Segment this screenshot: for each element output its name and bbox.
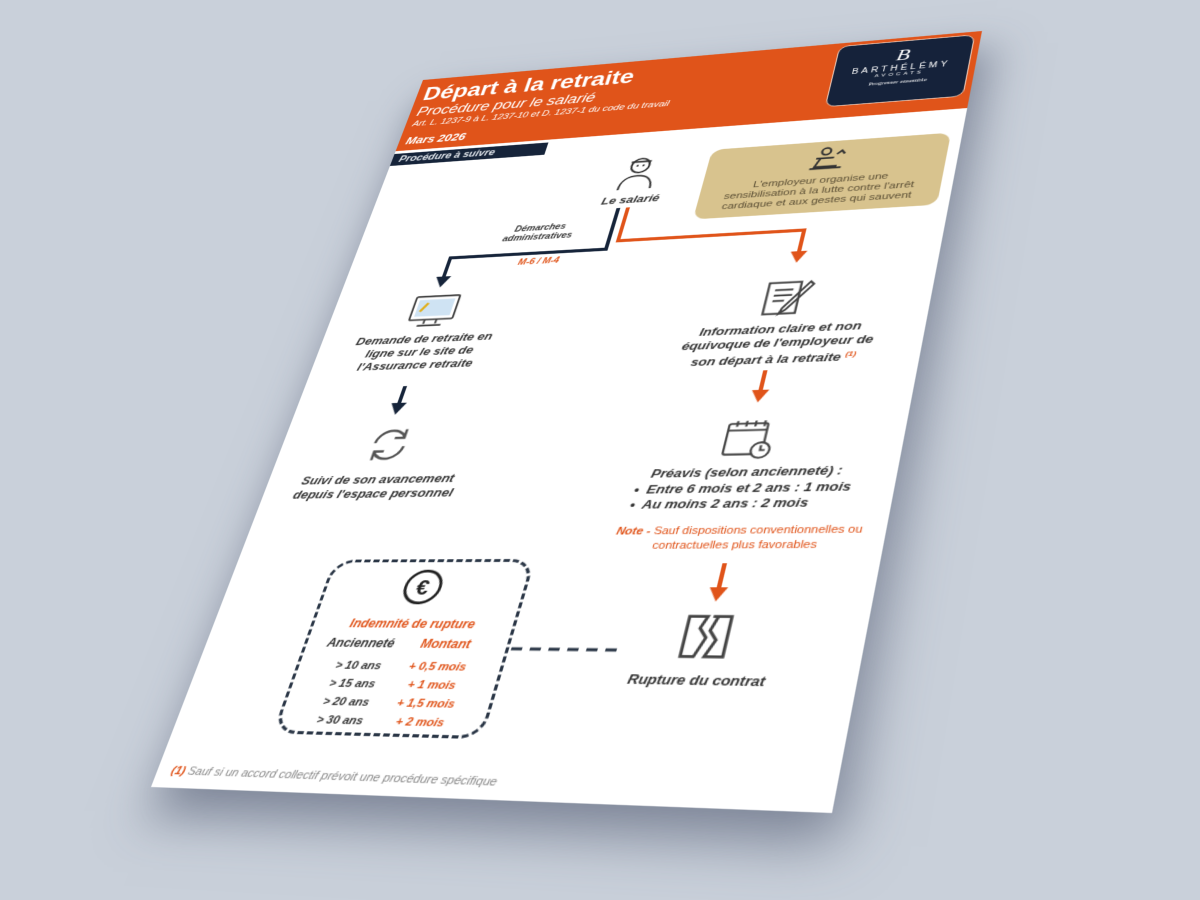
icon: refresh xyxy=(359,425,419,464)
dark branch xyxy=(443,208,618,278)
dashed connector xyxy=(511,649,625,650)
indemnite box: Indemnité de rupture xyxy=(348,617,477,631)
indemnite box: + 2 mois xyxy=(394,716,446,730)
arrows xyxy=(399,386,405,405)
header xyxy=(396,31,982,151)
step: rupture xyxy=(611,611,794,695)
icon: computer xyxy=(403,293,464,329)
logo: AVOCATS xyxy=(874,70,924,79)
step: preavis: Préavis (selon ancienneté) : xyxy=(650,463,844,480)
logo: Progresser ensemble xyxy=(868,76,928,87)
icon: euro xyxy=(396,568,450,606)
logo: BARTHÉLÉMY xyxy=(851,60,951,76)
step: information employeur: Information claire et non équivoque de l'employeur de son départ à la retraite (1) xyxy=(680,319,875,369)
step: demande en ligne: Demande de retraite en ligne sur le site de l'Assurance retraite xyxy=(354,330,494,373)
date: Mars 2026 xyxy=(404,131,468,146)
label: M-6/M-4: M-6 / M-4 xyxy=(517,256,560,267)
step: suivi: Suivi de son avancement depuis l'espace personnel xyxy=(291,471,456,501)
indemnite box: + 1 mois xyxy=(406,679,457,692)
section bar xyxy=(390,142,548,166)
indemnite box: + 1,5 mois xyxy=(395,697,457,711)
articles: Art. L. 1237-9 à L. 1237-10 et D. 1237-1 du code du travail xyxy=(411,99,670,128)
gold callout xyxy=(693,133,951,219)
icon: document pen xyxy=(757,275,819,318)
indemnite box xyxy=(272,559,536,739)
section bar: Procédure à suivre xyxy=(397,147,497,164)
step: information employeur xyxy=(675,272,888,370)
title: Départ à la retraite xyxy=(420,66,637,104)
flow lines xyxy=(151,31,982,813)
logo: B xyxy=(895,45,912,64)
salarie xyxy=(588,152,684,210)
step: suivi xyxy=(273,423,494,502)
indemnite box: > 20 ans xyxy=(321,696,371,709)
step: preavis: • Au moins 2 ans : 2 mois xyxy=(628,495,810,512)
step: rupture: Rupture du contrat xyxy=(626,671,767,689)
footnote: (1) Sauf si un accord collectif prévoit une procédure spécifique xyxy=(169,765,499,789)
orange branch xyxy=(611,196,812,263)
indemnite box: + 0,5 mois xyxy=(407,661,468,674)
icon: person xyxy=(612,153,665,191)
indemnite box: Montant xyxy=(419,637,473,651)
indemnite box: > 10 ans xyxy=(333,660,383,672)
salarie: Le salarié xyxy=(600,192,661,207)
paper xyxy=(151,31,982,813)
icon: euro: € xyxy=(413,577,432,599)
indemnite box: > 15 ans xyxy=(327,678,377,690)
label: demarches: Démarches administratives xyxy=(501,223,573,244)
icon: calendar xyxy=(717,418,780,462)
subtitle: Procédure pour le salarié xyxy=(415,90,598,119)
icon: torn paper xyxy=(672,612,740,662)
step: preavis xyxy=(591,415,892,562)
step: preavis: Note - Sauf dispositions conventionnelles ou contractuelles plus favorables xyxy=(615,524,864,552)
indemnite box: Ancienneté xyxy=(325,636,397,650)
indemnite box: > 30 ans xyxy=(315,714,365,727)
step: demande en ligne xyxy=(336,291,515,378)
gold callout: L'employeur organise une sensibilisation à la lutte contre l'arrêt cardiaque et aux gestes qui sauvent xyxy=(720,171,915,212)
logo xyxy=(825,34,975,107)
icon: cpr xyxy=(802,144,853,173)
step: preavis: • Entre 6 mois et 2 ans : 1 mois xyxy=(632,479,853,497)
